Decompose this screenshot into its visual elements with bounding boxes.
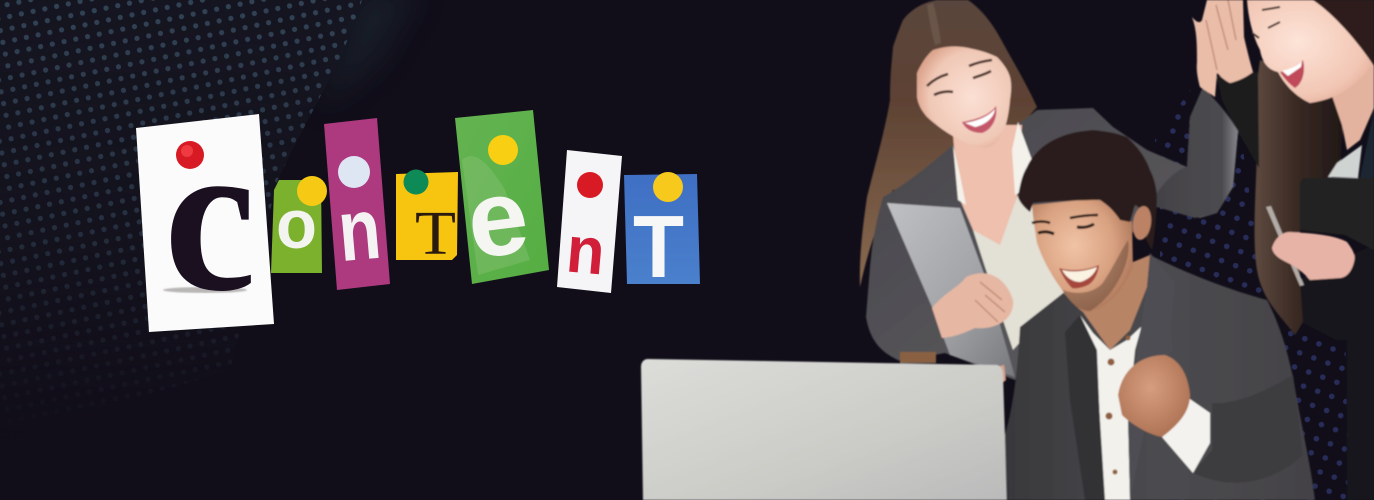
- letter T blue paper: T: [633, 197, 684, 296]
- right lapel: [1128, 253, 1175, 500]
- raised hands: [1192, 0, 1253, 97]
- shirt: [1080, 262, 1153, 500]
- mouth: [1059, 265, 1099, 288]
- forearm shadow: [1193, 375, 1303, 483]
- dark suit body: [1300, 245, 1374, 500]
- letter O paper: [271, 176, 327, 273]
- letter C paper: c: [164, 96, 256, 337]
- letter T paper: T: [415, 200, 456, 268]
- black tablet: [1300, 178, 1374, 250]
- blouse: [1328, 145, 1362, 178]
- letter T paper: [396, 170, 458, 268]
- teeth: [965, 109, 995, 127]
- brows: [1032, 215, 1098, 223]
- cut-out word: CoNTeNT: [136, 96, 700, 337]
- hand behind laptop: [993, 365, 1006, 385]
- left lapel: [1065, 315, 1105, 500]
- palms: [1192, 0, 1253, 97]
- jacket lapel: [1360, 110, 1374, 180]
- letter N white paper: n: [564, 211, 608, 289]
- neck: [1083, 255, 1150, 350]
- wooden detail: [900, 352, 936, 363]
- teeth: [1062, 267, 1097, 282]
- folder: [887, 203, 1015, 377]
- letter E paper: e: [460, 154, 535, 281]
- hair part highlight: [927, 3, 941, 45]
- finger creases: [975, 282, 1005, 322]
- left dot pattern: [0, 0, 362, 376]
- jacket: [866, 87, 1238, 380]
- long hair: [1255, 60, 1345, 335]
- woman on right: [1217, 0, 1374, 500]
- letter T blue paper: [624, 172, 700, 296]
- right brow and eye: [969, 60, 992, 78]
- hand on folder: [932, 273, 1013, 338]
- long hair: [860, 0, 1037, 287]
- jacket sleeve: [1150, 87, 1238, 218]
- raised fist: [1118, 355, 1190, 437]
- open mouth: [1280, 60, 1304, 88]
- face: [1247, 0, 1374, 103]
- letter N paper: [324, 118, 390, 290]
- teeth: [1282, 61, 1302, 76]
- face: [1032, 198, 1133, 312]
- cuff: [1162, 397, 1210, 473]
- suit jacket: [1005, 255, 1315, 500]
- top glow: [320, 0, 420, 110]
- woman on left: [860, 0, 1238, 380]
- ear: [1131, 205, 1153, 241]
- face: [917, 46, 1011, 148]
- smile: [962, 106, 996, 133]
- letter E paper: [455, 110, 549, 284]
- shirt buttons: [1106, 336, 1130, 474]
- right dot pattern: [1155, 90, 1350, 500]
- neck: [1330, 60, 1374, 150]
- upper-right hair: [1313, 0, 1374, 66]
- hand with pen: [1272, 232, 1355, 280]
- letter O paper: o: [276, 185, 317, 263]
- letter N paper: n: [334, 180, 384, 280]
- stubble: [1063, 240, 1129, 311]
- neck and chest: [953, 125, 1022, 252]
- laptop: [641, 359, 1007, 500]
- finger lines: [1206, 0, 1236, 70]
- left brow and eye: [927, 74, 953, 95]
- blouse: [973, 188, 1075, 350]
- dark sleeve: [1217, 72, 1259, 168]
- blouse collar left: [953, 145, 966, 205]
- photo: three colleagues celebrating: [641, 0, 1374, 500]
- pen: [1266, 206, 1304, 286]
- man in front: [993, 130, 1315, 500]
- eyes and brow: [1252, 7, 1280, 38]
- letter N white paper: [557, 150, 622, 293]
- eyes: [1038, 224, 1094, 234]
- hair: [1018, 130, 1157, 250]
- blouse collar right: [1012, 122, 1032, 195]
